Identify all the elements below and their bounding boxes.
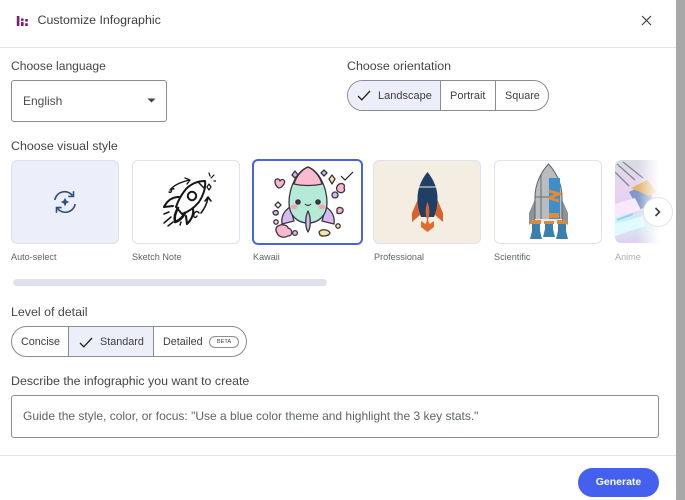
heading: choose language: Choose language [11, 59, 106, 73]
orientation selector [347, 80, 549, 111]
dropdown value: English [23, 94, 62, 108]
option: detailed beta: BETA [217, 338, 231, 344]
option: concise: Concise [21, 336, 60, 348]
illustration: scientific rocket [529, 163, 568, 239]
option: landscape selected: Landscape [378, 90, 432, 102]
option: landscape selected [348, 81, 441, 110]
caption: anime: Anime [615, 252, 641, 262]
icon: auto-select refresh spark [54, 190, 76, 214]
card: sketch note [132, 160, 240, 244]
card: kawaii selected [252, 159, 363, 245]
caption: scientific: Scientific [494, 252, 530, 262]
heading: choose orientation: Choose orientation [347, 59, 451, 73]
option: concise [12, 327, 69, 356]
option: standard selected [69, 327, 154, 356]
caption: sketch note: Sketch Note [132, 252, 182, 262]
placeholder text: Guide the style, color, or focus: "Use a blue color theme and highlight the 3 key stats." [23, 409, 478, 423]
card: anime fading out [615, 160, 657, 243]
illustration: kawaii rocket [272, 166, 354, 238]
language dropdown [11, 80, 167, 122]
detail selector [11, 326, 247, 357]
icon: close [642, 16, 652, 26]
button: next arrow [643, 197, 673, 227]
illustration: sketch rocket [162, 172, 216, 227]
option: detailed beta: Detailed [163, 336, 203, 348]
caption: kawaii: Kawaii [253, 252, 280, 262]
heading: describe the infographic: Describe the infographic you want to create [11, 374, 249, 388]
caption: professional: Professional [374, 252, 424, 262]
card: auto-select [11, 160, 119, 244]
icon: chevron right [655, 207, 660, 217]
heading: choose visual style: Choose visual style [11, 139, 118, 153]
icon: infographic bars [16, 16, 28, 26]
icon: dropdown arrow [148, 98, 156, 102]
heading: level of detail: Level of detail [11, 305, 87, 319]
option: square: Square [505, 90, 540, 102]
button: generate: Generate [596, 476, 641, 488]
option: portrait: Portrait [450, 90, 485, 102]
button: generate [578, 468, 659, 497]
illustration: professional rocket [412, 172, 443, 232]
scrollbar [13, 279, 327, 286]
title: Customize Infographic [38, 13, 161, 27]
option: portrait [441, 81, 496, 110]
option: standard selected: Standard [100, 336, 144, 348]
text input [11, 395, 659, 438]
card: scientific [494, 160, 602, 244]
caption: auto-select: Auto-select [11, 252, 56, 262]
card: professional [373, 160, 481, 244]
option: detailed beta [163, 336, 239, 348]
